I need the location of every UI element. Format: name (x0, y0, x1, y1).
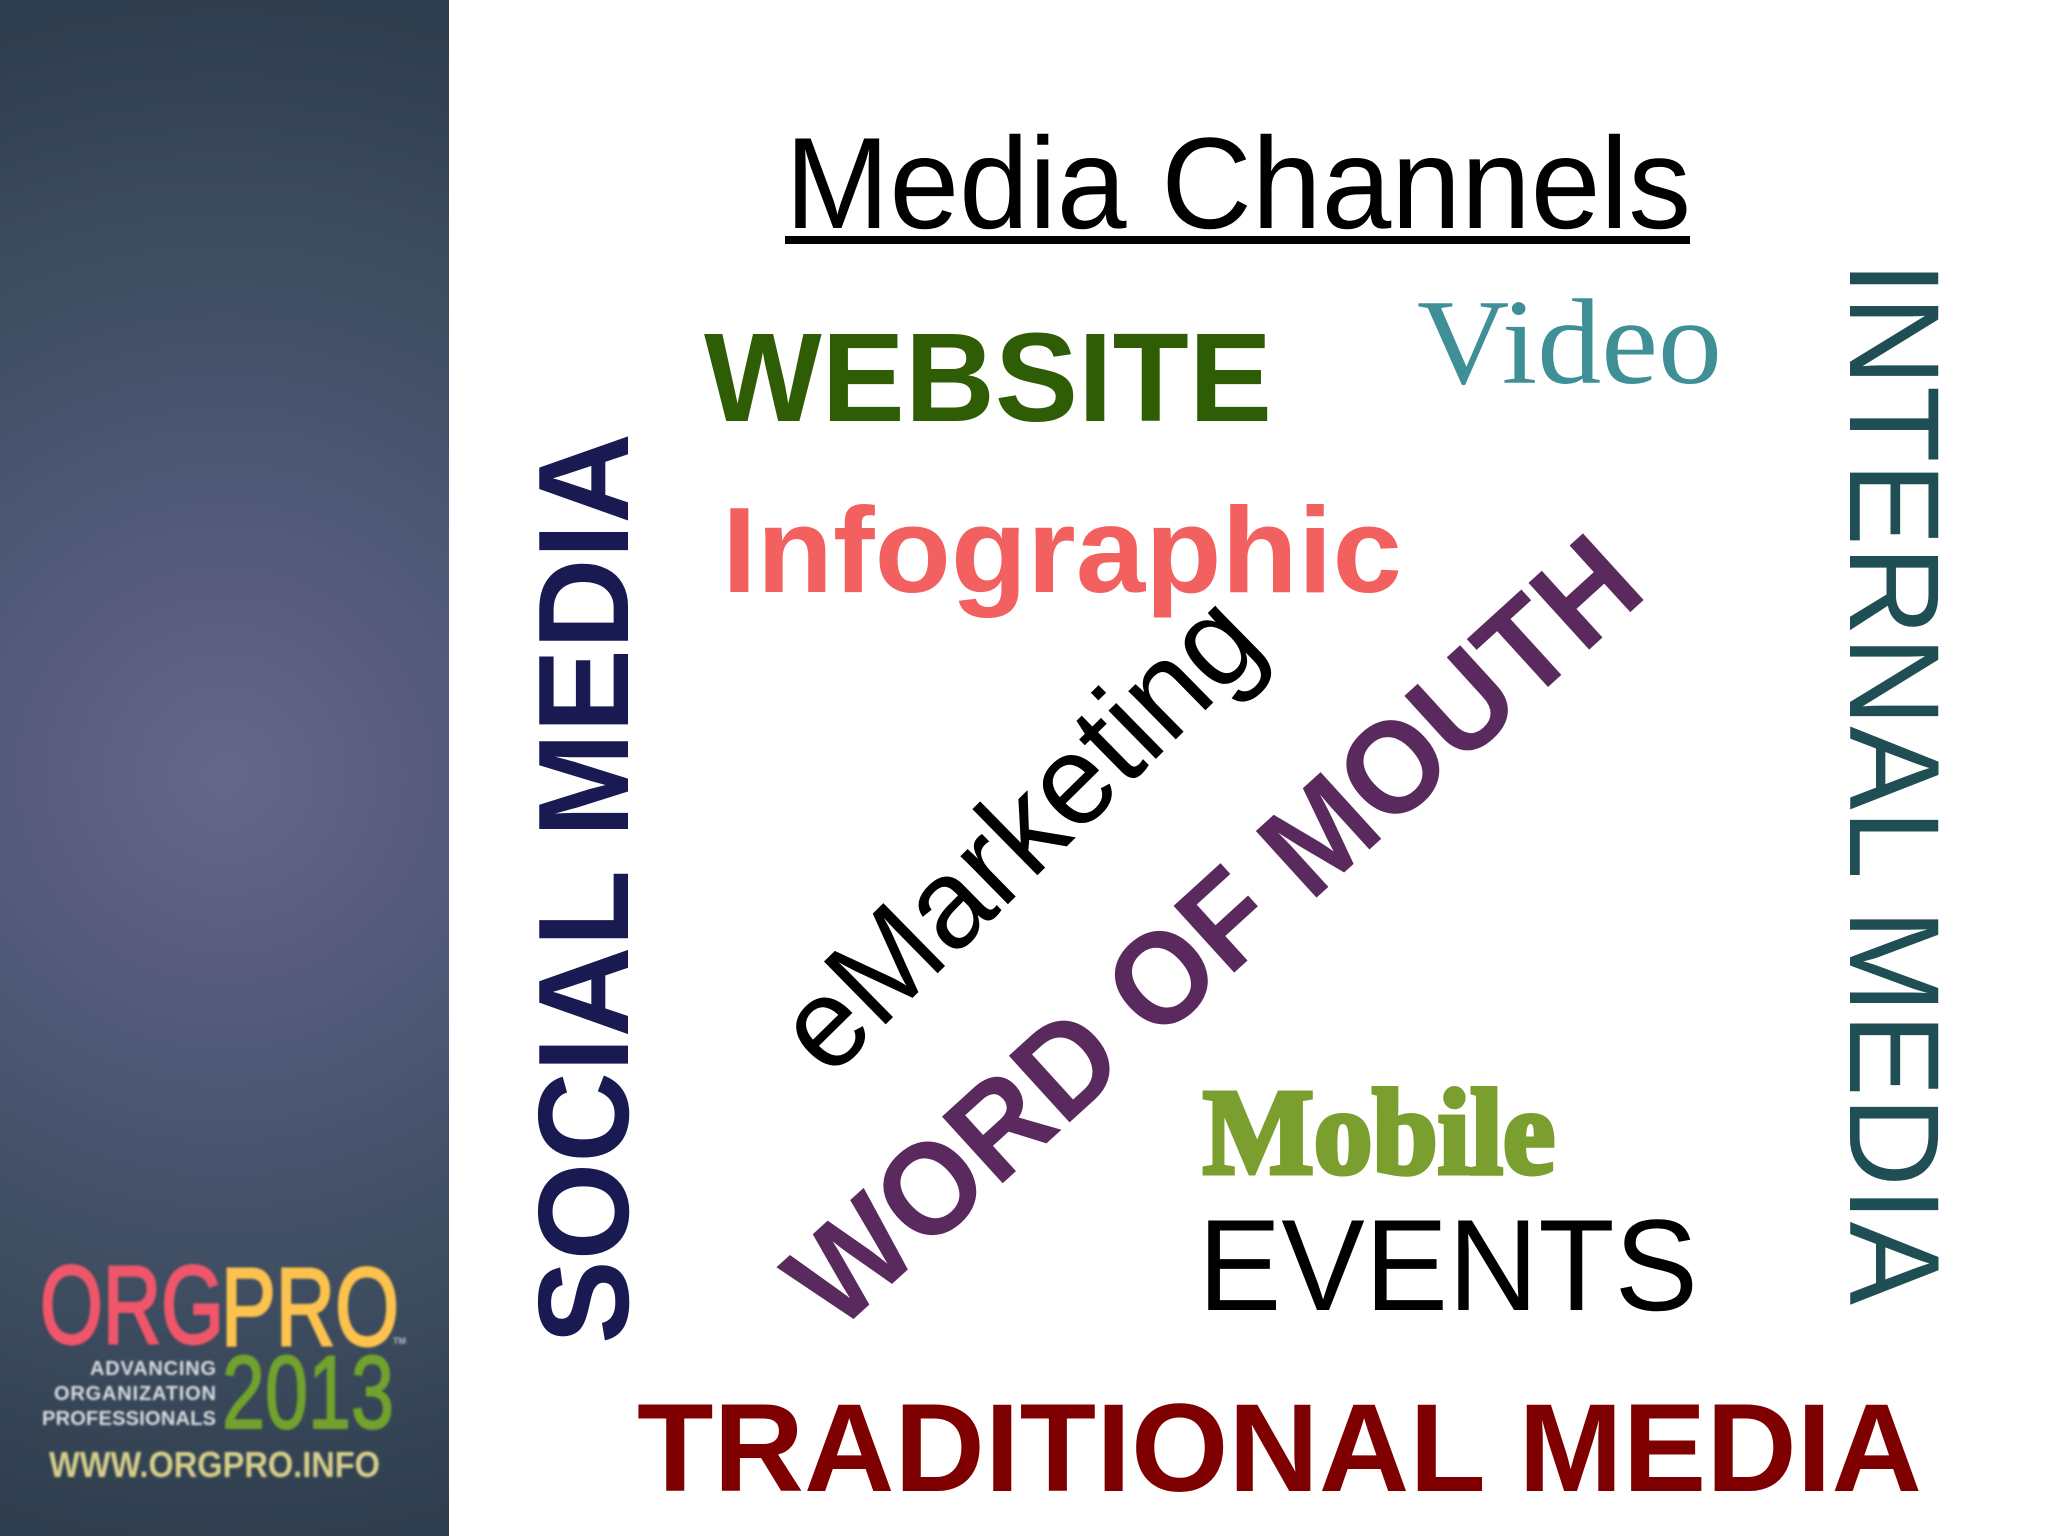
channel: eMarketing: eMarketing (748, 566, 1288, 1100)
logo tagline: professionals: PROFESSIONALS (42, 1408, 216, 1430)
panel: left sidebar (0, 0, 449, 1536)
channel: INTERNAL MEDIA: INTERNAL MEDIA (1822, 261, 1965, 1306)
channel: SOCIAL MEDIA: SOCIAL MEDIA (512, 433, 656, 1344)
channel: Video: Video (1417, 275, 1722, 410)
channel: WORD OF MOUTH: WORD OF MOUTH (757, 506, 1669, 1355)
title: Media Channels (785, 110, 1691, 256)
logo tagline: organization: ORGANIZATION (54, 1383, 216, 1405)
logo year 2013: 2013 (222, 1335, 394, 1451)
logo website URL: WWW.ORGPRO.INFO (49, 1444, 380, 1485)
channel: WEBSITE: WEBSITE (704, 307, 1272, 448)
channel: EVENTS: EVENTS (1198, 1192, 1698, 1338)
channel: Infographic: Infographic (722, 482, 1402, 618)
channel: Mobile: Mobile (1203, 1065, 1555, 1200)
logo word: ORG: ORG (40, 1244, 224, 1367)
logo word: PRO: PRO (221, 1246, 399, 1369)
logo trademark: TM (393, 1336, 406, 1346)
channel: TRADITIONAL MEDIA: TRADITIONAL MEDIA (637, 1379, 1922, 1518)
logo: ORGPRO 2013 (40, 1244, 406, 1485)
logo tagline: advancing: ADVANCING (90, 1358, 216, 1380)
